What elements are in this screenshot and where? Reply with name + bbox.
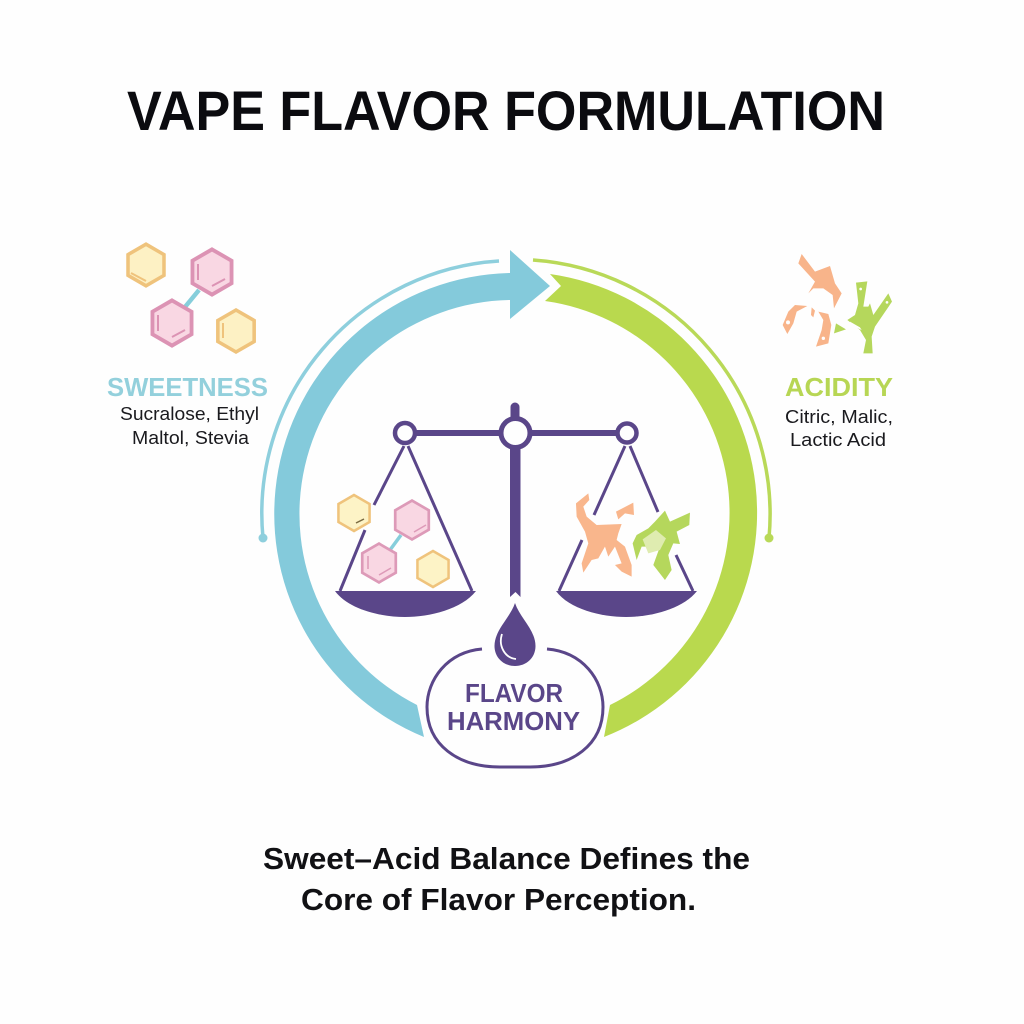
- text: acidity ingredients: [785, 406, 893, 450]
- icon: balance scale: [335, 402, 697, 617]
- thin arc: green: [533, 260, 774, 542]
- scale pivot rings: [395, 418, 636, 448]
- thin arc: blue: [258, 261, 499, 542]
- scale post: [510, 402, 520, 597]
- caption: Core of Flavor Perception.: [301, 882, 696, 917]
- icon: sweetness molecules: [128, 244, 254, 352]
- title: VAPE FLAVOR FORMULATION: [127, 79, 885, 142]
- right pan acid shards: [576, 493, 690, 580]
- left pan: [335, 591, 476, 617]
- text: sweetness ingredients: Sucralose, Ethyl: [120, 403, 259, 424]
- caption: [263, 841, 750, 917]
- text: sweetness ingredients: [120, 403, 259, 448]
- callout: flavor harmony: HARMONY: [447, 706, 580, 736]
- heading: sweetness: SWEETNESS: [107, 374, 268, 402]
- icon: liquid drop: [494, 603, 536, 666]
- heading: acidity: ACIDITY: [785, 374, 893, 402]
- left pan molecules: [338, 495, 449, 587]
- arrow: blue sweetness band: [274, 250, 550, 737]
- right pan: [556, 591, 697, 617]
- text: sweetness ingredients: Maltol, Stevia: [132, 427, 250, 448]
- arrow: green acidity band: [545, 274, 757, 737]
- callout: flavor harmony: FLAVOR: [465, 678, 563, 708]
- icon: acid shards: [783, 254, 892, 353]
- text: acidity ingredients: Citric, Malic,: [785, 406, 893, 427]
- left pan strings: [340, 446, 472, 591]
- caption: Sweet–Acid Balance Defines the: [263, 841, 750, 876]
- scale beam: [410, 430, 622, 436]
- text: acidity ingredients: Lactic Acid: [790, 429, 886, 450]
- right pan strings: [559, 446, 693, 591]
- callout: flavor harmony: [427, 649, 603, 767]
